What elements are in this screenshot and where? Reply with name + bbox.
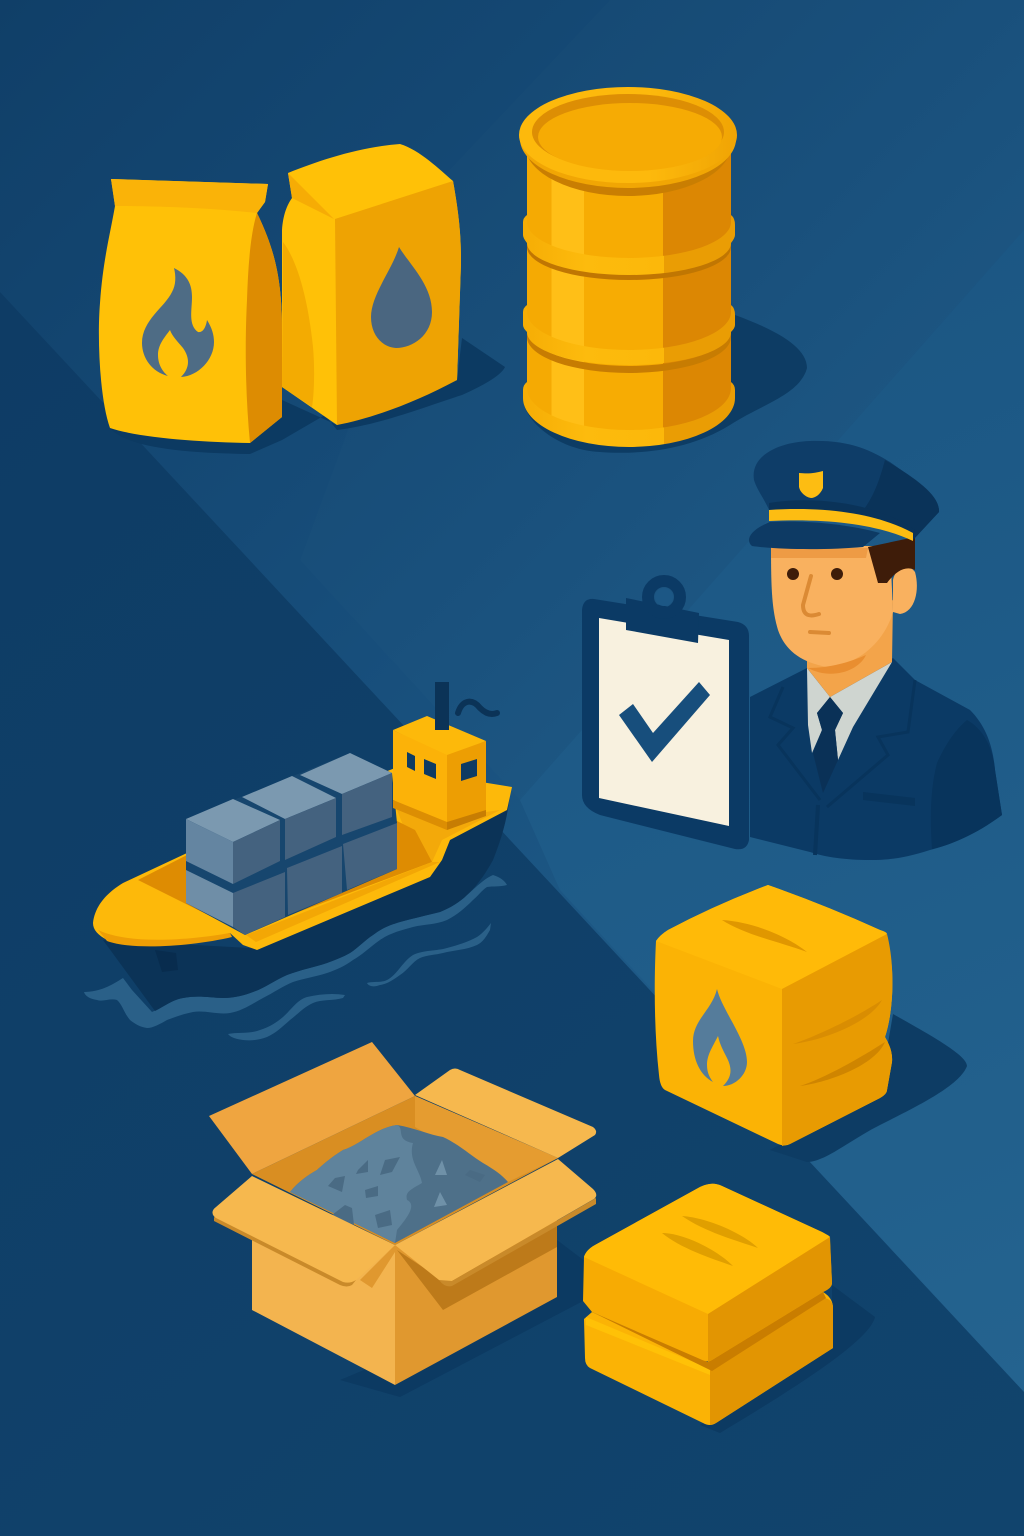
neck [807, 600, 893, 697]
lower sack [584, 1292, 833, 1425]
hull [103, 793, 510, 1011]
box interior [252, 1096, 558, 1245]
cargo ship [84, 682, 512, 1040]
upper sack [583, 1184, 832, 1361]
cargo containers [186, 753, 397, 935]
officer with clipboard [582, 441, 1002, 860]
deck [93, 768, 512, 950]
peaked cap [749, 441, 939, 549]
box flaps [209, 1042, 596, 1286]
face details [771, 537, 915, 674]
stack shadow [700, 1285, 875, 1433]
stacked yellow sacks [583, 1184, 875, 1433]
sack shadow [770, 1014, 967, 1162]
barrel lid [525, 94, 731, 196]
droplet bag [282, 144, 461, 425]
suit [750, 658, 1002, 860]
oil barrel [519, 87, 807, 453]
yellow sack with flame [655, 885, 967, 1162]
barrel ribs [523, 215, 735, 447]
bag shadow [110, 338, 505, 454]
open cardboard box [209, 1042, 596, 1397]
box walls [252, 1210, 395, 1385]
bags of fuel [99, 144, 505, 454]
coal pile [290, 1125, 508, 1243]
shirt collar and tie [807, 662, 892, 793]
water waves [84, 875, 507, 1040]
face [771, 546, 893, 667]
barrel body [527, 135, 731, 440]
ear [893, 567, 917, 614]
flame bag [99, 179, 282, 443]
box shadow [340, 1240, 590, 1397]
clipboard [582, 581, 749, 849]
barrel shadow [524, 315, 807, 453]
bridge [393, 682, 497, 830]
